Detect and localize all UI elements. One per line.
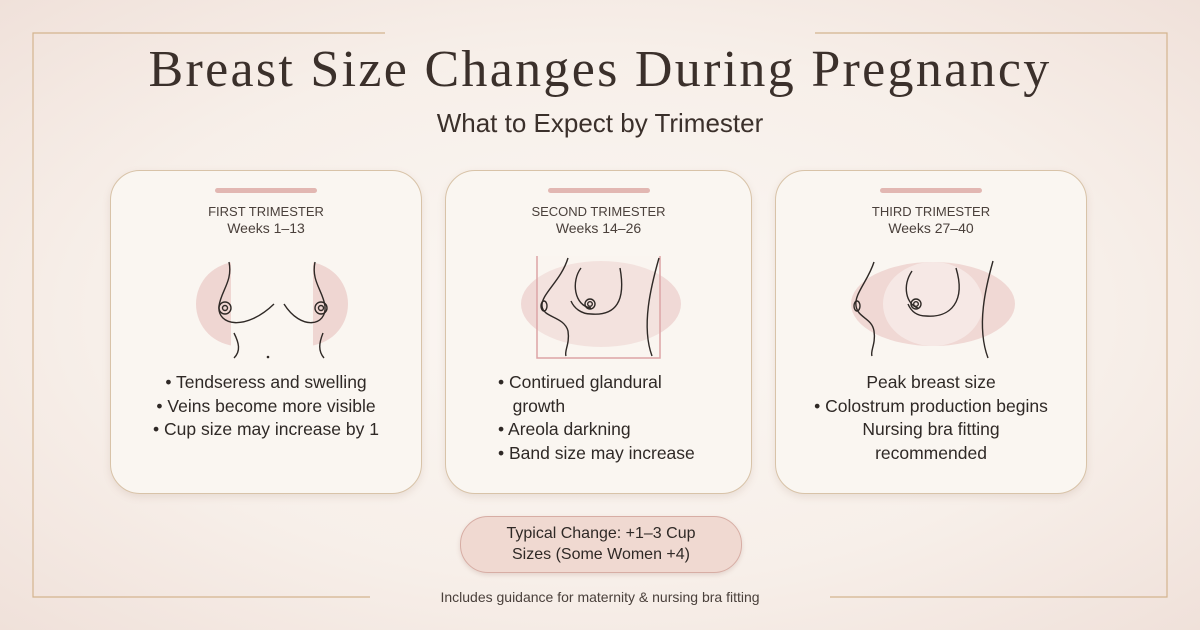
panel: third trimester <box>775 170 1087 494</box>
bullets: second trimester <box>498 372 695 462</box>
bullets: third trimester: Nursing bra fitting <box>862 419 1000 439</box>
callout: typical change: Typical Change: +1–3 Cup <box>506 525 696 542</box>
bullets: first trimester: • Tendseress and swelling <box>165 372 367 392</box>
illustration: first trimester <box>196 262 348 358</box>
callout: typical change <box>460 516 742 573</box>
heading: second trimester: Weeks 14–26 <box>556 220 641 236</box>
footer: Includes guidance for maternity & nursing bra fitting <box>440 589 760 605</box>
bullets: third trimester <box>814 372 1048 462</box>
illustration: third trimester <box>851 260 1015 358</box>
bullets: first trimester <box>153 372 379 439</box>
panel: second trimester <box>445 170 752 494</box>
bullets: second trimester: • Areola darkning <box>498 419 631 439</box>
bullets: first trimester: • Veins become more visible <box>156 396 376 416</box>
heading: third trimester: THIRD TRIMESTER <box>872 204 990 219</box>
bullets: first trimester: • Cup size may increase by 1 <box>153 419 379 439</box>
panel: first trimester <box>110 170 422 494</box>
subtitle: What to Expect by Trimester <box>437 108 763 138</box>
callout: typical change: Sizes (Some Women +4) <box>512 546 690 563</box>
bullets: second trimester: • Band size may increase <box>498 442 695 462</box>
heading: second trimester <box>531 204 666 236</box>
illustration: second trimester <box>521 256 681 359</box>
heading: first trimester: FIRST TRIMESTER <box>208 204 324 219</box>
heading: second trimester: SECOND TRIMESTER <box>531 204 666 219</box>
bullets: third trimester: Peak breast size <box>866 372 996 392</box>
bullets: third trimester: • Colostrum production begins <box>814 396 1048 416</box>
heading: third trimester: Weeks 27–40 <box>888 220 974 236</box>
bullets: third trimester: recommended <box>875 442 987 462</box>
bullets: second trimester: growth <box>513 396 565 416</box>
heading: third trimester <box>872 204 990 236</box>
heading: first trimester: Weeks 1–13 <box>227 220 305 236</box>
bullets: second trimester: • Contirued glandural <box>498 372 662 392</box>
heading: first trimester <box>208 204 324 236</box>
title: Breast Size Changes During Pregnancy <box>148 41 1052 98</box>
